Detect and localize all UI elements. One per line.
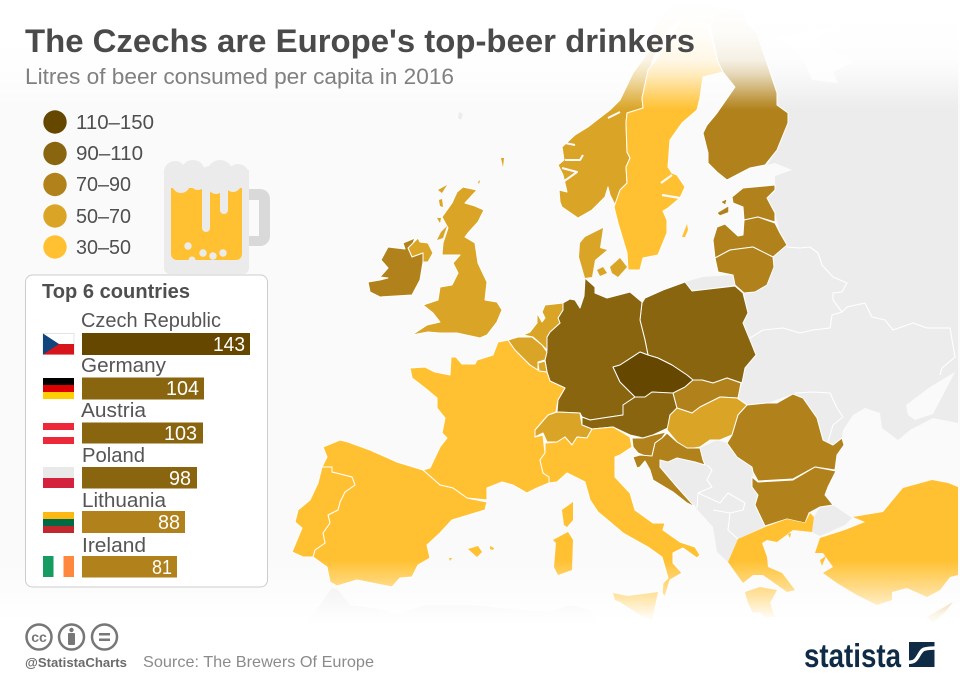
legend item 50–70: 50–70 — [76, 206, 131, 228]
Italian and Spanish islands — [449, 502, 658, 620]
row: Germany: 104 — [166, 378, 199, 400]
statista logo: statista — [804, 637, 902, 674]
row: Ireland: 81 — [152, 557, 172, 579]
France — [410, 340, 565, 500]
Germany — [545, 278, 648, 420]
row: Czech Republic: Czech Republic — [81, 310, 221, 332]
Poland — [640, 282, 756, 383]
grey country borders — [697, 247, 955, 539]
row: Ireland — [43, 535, 177, 579]
source: Source: The Brewers Of Europe — [143, 654, 374, 671]
row: Czech Republic — [43, 310, 250, 356]
non-EU land: eastern Europe — [292, 0, 958, 640]
Hungary — [667, 397, 747, 449]
title: The Czechs are Europe's top-beer drinkers — [25, 23, 695, 59]
Swedish inlets — [661, 175, 680, 198]
row: Austria: 103 — [164, 423, 197, 445]
row: Germany — [43, 355, 204, 400]
Latvia — [713, 217, 787, 258]
Denmark — [579, 228, 627, 278]
Turkey — [815, 480, 958, 605]
Croatia — [633, 433, 705, 507]
legend — [43, 110, 154, 259]
Great Britain and Northern Ireland — [408, 158, 504, 338]
Slovenia — [632, 432, 666, 456]
Norway — [558, 2, 720, 218]
Belgium — [508, 337, 547, 370]
row: Czech Republic: 143 — [213, 334, 245, 356]
Finland — [703, 7, 788, 180]
Lithuania — [715, 247, 774, 293]
row: Austria: Austria — [81, 400, 147, 422]
social handle: @StatistaCharts — [25, 656, 127, 670]
subtitle: Litres of beer consumed per capita in 2016 — [25, 64, 454, 89]
Czech Republic — [613, 352, 693, 397]
map of Europe — [292, 0, 958, 640]
row: Ireland: Ireland — [82, 535, 146, 557]
legend item 30–50 — [43, 235, 131, 259]
row: Lithuania: 88 — [158, 512, 180, 534]
footer background — [0, 626, 960, 684]
icon: beer mug — [164, 160, 270, 274]
Estonia — [718, 185, 775, 222]
Netherlands — [523, 303, 563, 350]
legend item 110–150: 110–150 — [76, 112, 154, 134]
row: Austria — [43, 400, 203, 445]
Romania — [727, 394, 844, 481]
legend item 90–110: 90–110 — [76, 143, 143, 165]
legend item 50–70 — [43, 204, 131, 228]
icon: creative commons badges — [26, 624, 117, 650]
Sweden — [614, 17, 723, 270]
Bulgaria — [752, 467, 836, 526]
Switzerland — [535, 412, 592, 445]
row: Poland — [43, 445, 197, 490]
Luxembourg — [538, 361, 547, 372]
map fade at top — [0, 0, 960, 110]
legend item 90–110 — [43, 142, 143, 165]
Greece — [728, 513, 826, 617]
Austria — [582, 392, 677, 438]
row: Lithuania: Lithuania — [82, 490, 167, 512]
legend item 30–50: 30–50 — [76, 237, 131, 259]
panel: top 6 countries — [26, 275, 268, 587]
Ireland — [368, 238, 423, 297]
Italy — [540, 427, 700, 597]
legend item 70–90: 70–90 — [76, 174, 131, 196]
row: Lithuania — [43, 490, 185, 534]
Cyprus — [927, 602, 953, 623]
row: Germany: Germany — [81, 355, 166, 377]
Portugal — [292, 467, 355, 557]
Gotland — [682, 224, 688, 237]
sea cut-outs — [777, 27, 955, 420]
row: Poland: 98 — [169, 468, 191, 490]
map fade at bottom — [0, 560, 960, 626]
Norwegian fjords — [562, 112, 620, 182]
Spain — [313, 440, 487, 587]
icon: creative commons badges: cc — [31, 629, 47, 645]
legend item 70–90 — [43, 173, 131, 196]
panel heading: Top 6 countries — [42, 281, 190, 303]
legend item 110–150 — [43, 110, 154, 134]
Slovakia — [673, 378, 741, 413]
row: Poland: Poland — [82, 445, 145, 467]
